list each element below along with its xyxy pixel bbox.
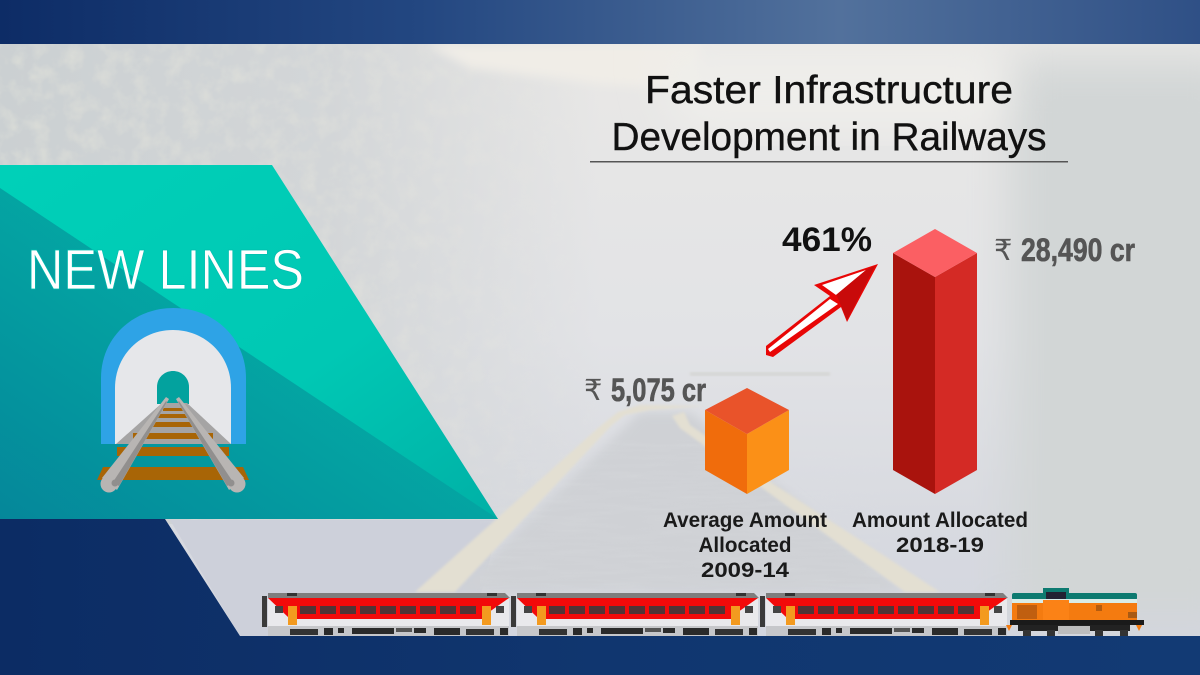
panel: teal new lines banner bbox=[0, 165, 498, 519]
value: 28,490 cr: 28,490 cr bbox=[1021, 232, 1135, 268]
label: amount allocated 2018-19: Amount Allocated bbox=[852, 509, 1028, 532]
bar: 2018-19 red column bbox=[893, 229, 977, 494]
value: 28,490 cr: ₹ bbox=[994, 233, 1012, 267]
title: Faster Infrastructure bbox=[645, 69, 1013, 112]
track bed bbox=[455, 412, 905, 592]
title bbox=[612, 69, 1046, 159]
label: amount allocated 2018-19 bbox=[852, 509, 1028, 557]
top navy band bbox=[0, 0, 1200, 44]
label: amount allocated 2018-19: 2018-19 bbox=[896, 534, 984, 557]
bar chart: allocation comparison bbox=[584, 229, 1135, 582]
label: average amount allocated: Allocated bbox=[698, 534, 792, 557]
left rail bbox=[415, 405, 706, 592]
right rail bbox=[672, 412, 940, 592]
label: average amount allocated: 2009-14 bbox=[701, 559, 789, 582]
train bbox=[262, 588, 1144, 636]
heading: new lines: NEW LINES bbox=[27, 238, 304, 302]
value: 5,075 cr: 5,075 cr bbox=[611, 372, 706, 408]
locomotive bbox=[1006, 588, 1144, 636]
bar: 2009-14 orange cube bbox=[705, 388, 789, 494]
label: average amount allocated: Average Amount bbox=[663, 509, 827, 532]
label: average amount allocated bbox=[663, 509, 827, 582]
bottom navy band bbox=[0, 519, 1200, 675]
coach 2 bbox=[511, 593, 759, 636]
title: Development in Railways bbox=[612, 116, 1046, 159]
icon: railway tunnel bbox=[97, 308, 249, 492]
arrow: growth bbox=[766, 264, 878, 357]
value: 5,075 cr bbox=[584, 372, 706, 408]
coach 3 bbox=[760, 593, 1008, 636]
value: 28,490 cr bbox=[994, 232, 1135, 268]
right rail bbox=[176, 397, 246, 492]
value: 5,075 cr: ₹ bbox=[584, 373, 602, 407]
left rail bbox=[100, 397, 169, 492]
coach 1 bbox=[262, 593, 510, 636]
growth percentage: 461% bbox=[782, 221, 872, 259]
